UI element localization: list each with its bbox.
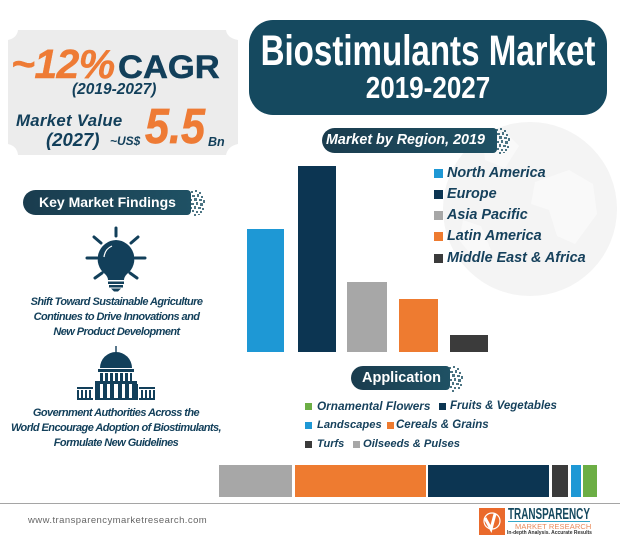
finding text 2: Government Authorities Across the [33, 407, 199, 419]
region legend: Europe [447, 186, 497, 202]
application legend: Cereals & Grains [396, 419, 489, 431]
bar: Latin America [399, 299, 438, 352]
application legend: Turfs [317, 438, 344, 450]
application legend: Landscapes [317, 419, 382, 431]
bar: Europe [298, 166, 336, 352]
logo subname: MARKET RESEARCH [515, 522, 591, 531]
heading: key market findings: Key Market Findings [39, 194, 176, 210]
logo mark [479, 508, 505, 535]
finding text 1: Shift Toward Sustainable Agriculture [31, 296, 202, 308]
segment: landscapes [571, 465, 581, 497]
CAGR label: CAGR [118, 49, 220, 85]
bar chart [247, 166, 488, 352]
finding text 1: Continues to Drive Innovations and [34, 311, 199, 323]
region legend: North America [447, 165, 546, 181]
application legend [305, 399, 557, 450]
title years: 2019-2027 [366, 70, 490, 105]
segment: ornamental [583, 465, 597, 497]
finding text 2: Formulate New Guidelines [54, 437, 178, 449]
icon: light bulb [86, 226, 146, 292]
heading: market by region [322, 128, 510, 154]
segment: cereals [295, 465, 426, 497]
market value number: 5.5 [145, 100, 205, 154]
logo [479, 506, 592, 536]
application legend: Oilseeds & Pulses [363, 438, 460, 450]
unit: Bn [208, 135, 225, 149]
application legend: Ornamental Flowers [317, 399, 430, 413]
bar: Middle East & Africa [450, 335, 488, 352]
market value label: Market Value [16, 111, 123, 130]
finding text 1: New Product Development [53, 326, 180, 338]
region legend: Middle East & Africa [447, 250, 586, 266]
CAGR period: (2019-2027) [72, 81, 156, 98]
application legend: Fruits & Vegetables [450, 400, 557, 412]
region legend [434, 165, 586, 266]
finding text 2: World Encourage Adoption of Biostimulants, [11, 422, 221, 434]
title panel [249, 20, 607, 115]
segment: turfs [552, 465, 568, 497]
bar: North America [247, 229, 284, 352]
finding text 2 [11, 407, 221, 449]
region legend: Asia Pacific [447, 207, 528, 223]
stacked bar [219, 465, 597, 497]
finding text 1 [30, 296, 203, 338]
bar: Asia Pacific [347, 282, 387, 352]
stat panel [8, 30, 238, 155]
heading: application: Application [362, 370, 441, 386]
heading: key market findings [23, 190, 205, 216]
logo name: TRANSPARENCY [508, 506, 590, 523]
logo tagline: In-depth Analysis. Accurate Results [507, 530, 592, 536]
heading: market by region: Market by Region, 2019 [326, 132, 485, 148]
segment: fruits [428, 465, 549, 497]
segment: oilseeds [219, 465, 292, 497]
region legend: Latin America [447, 228, 542, 244]
icon: government building [77, 346, 155, 400]
website url: www.transparencymarketresearch.com [28, 515, 207, 526]
globe background [443, 122, 617, 296]
heading: application [351, 366, 463, 392]
title: Biostimulants Market [261, 27, 595, 75]
CAGR value: ~12% [11, 41, 115, 87]
currency: ~US$ [110, 134, 140, 148]
market value year: (2027) [46, 129, 99, 150]
